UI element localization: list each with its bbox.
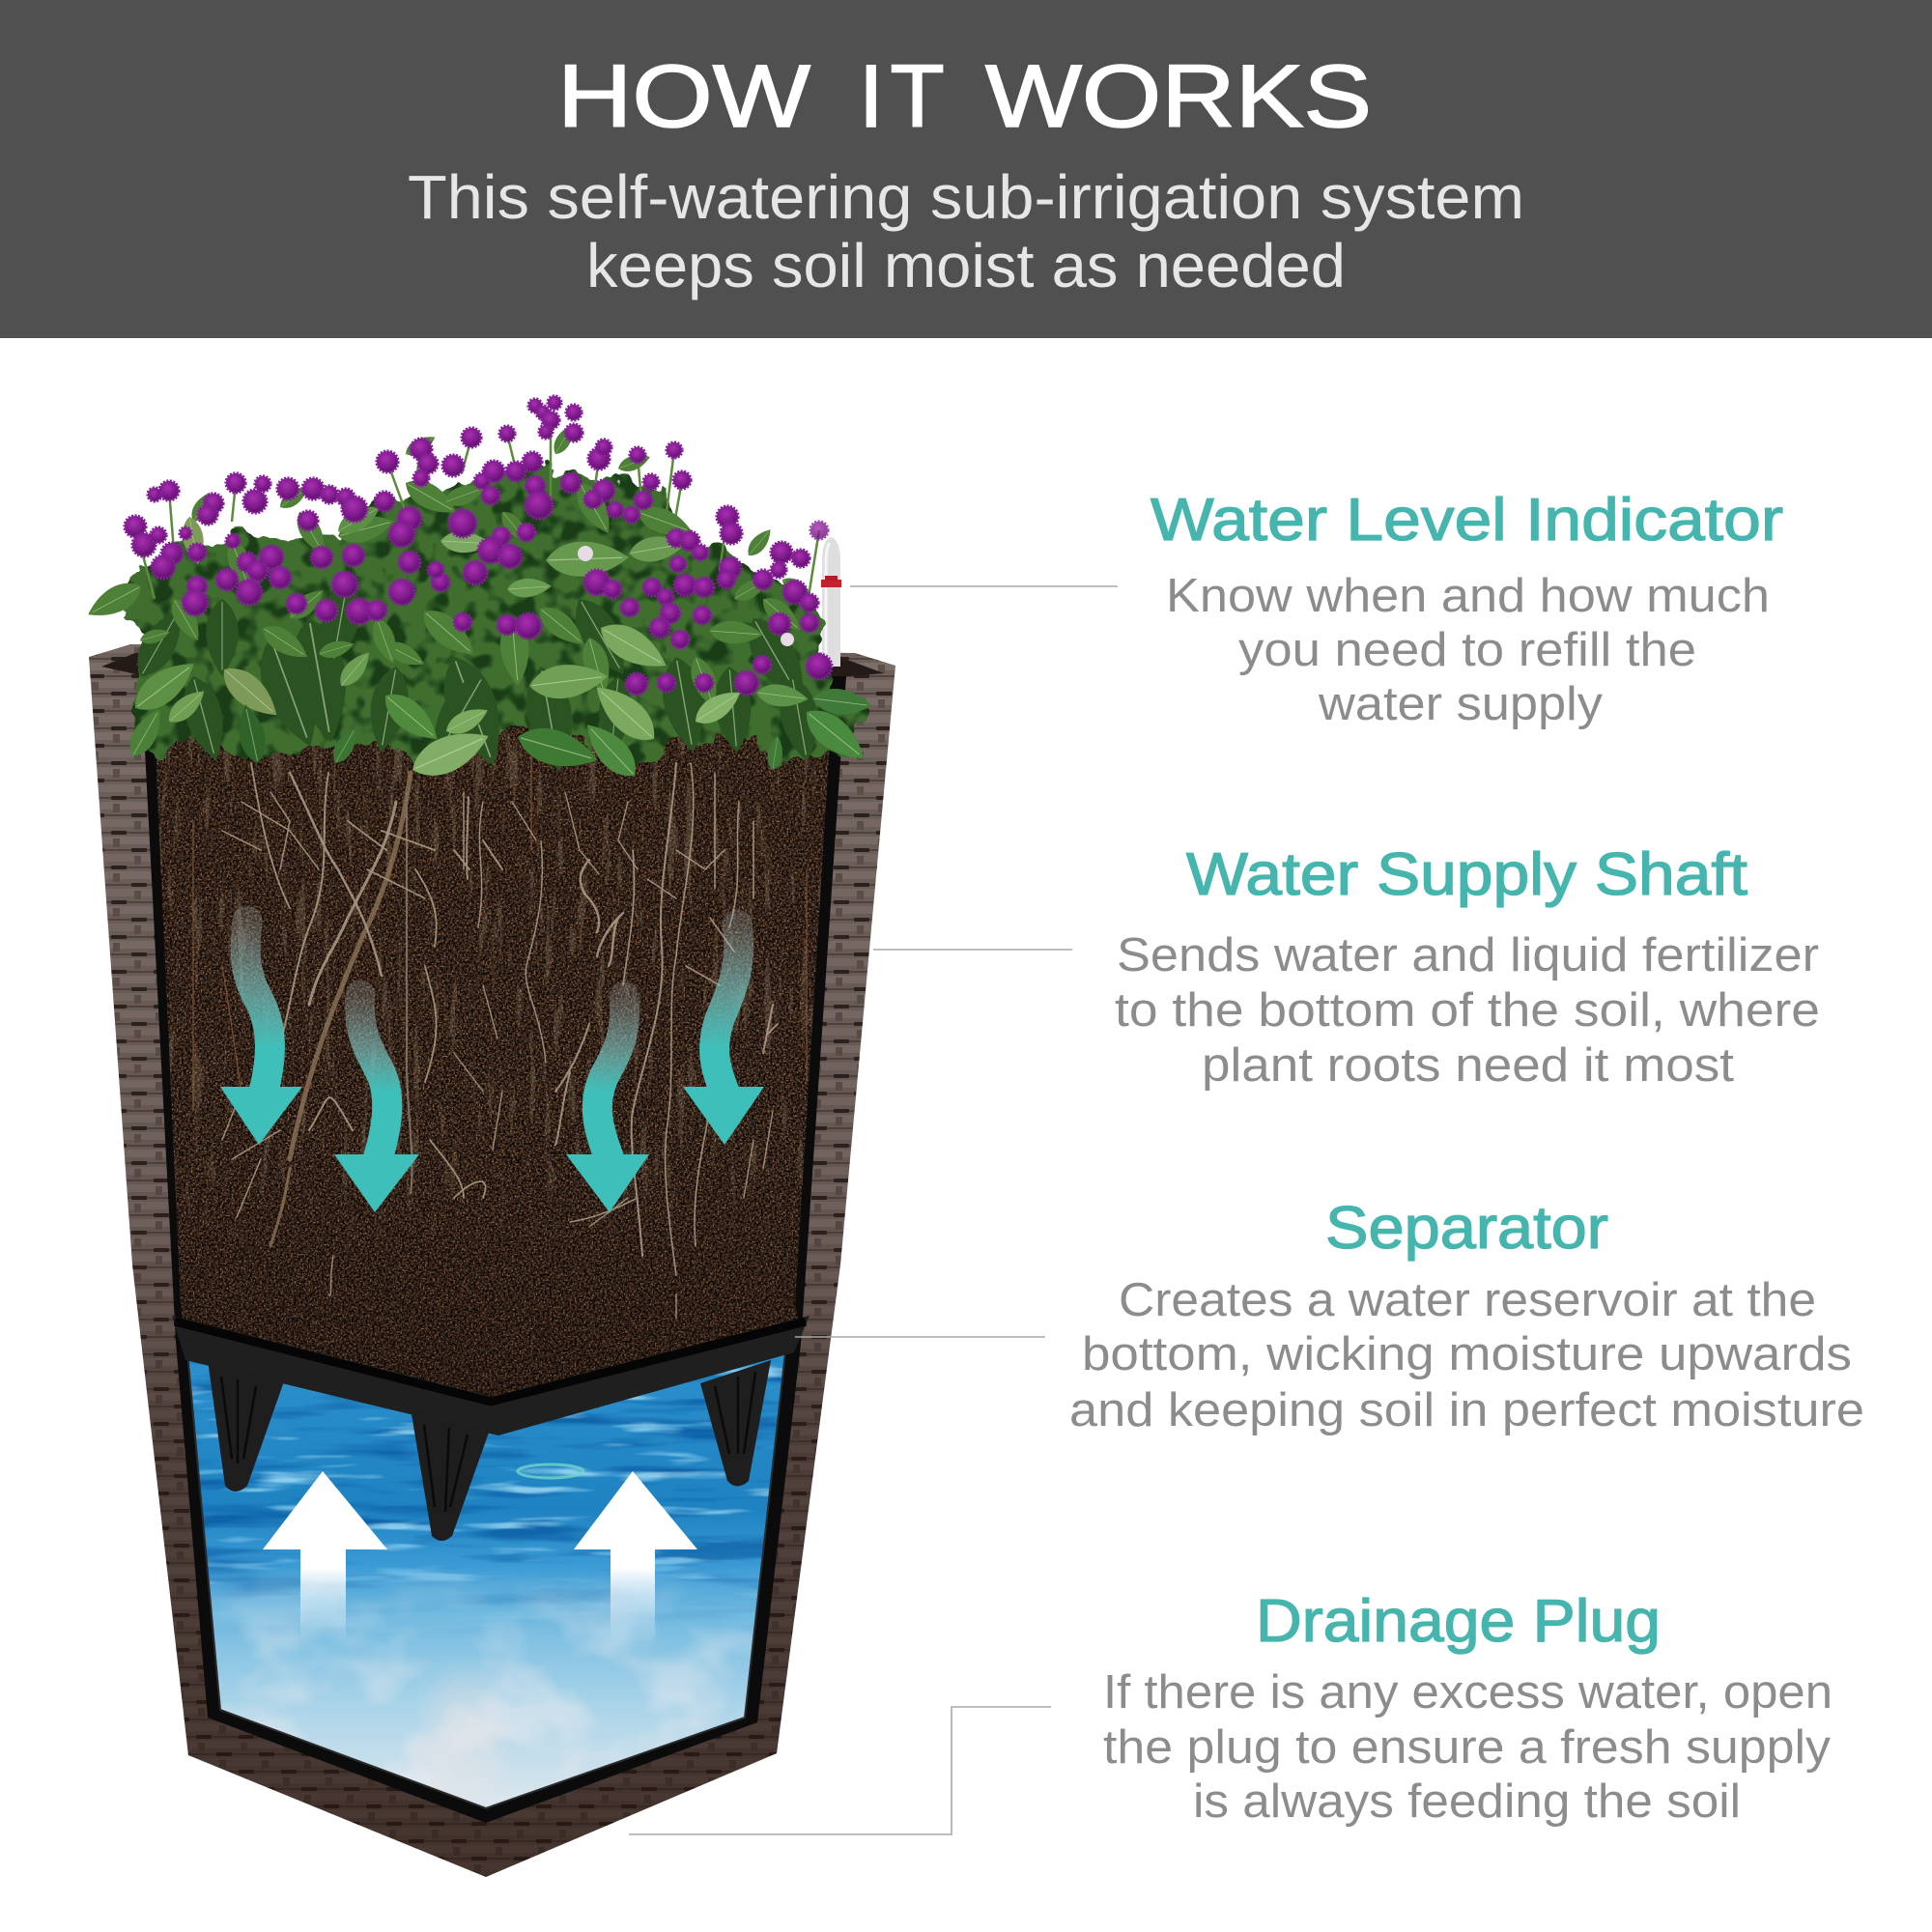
- gomphrena flowers: [125, 396, 832, 695]
- foliage mass: [121, 464, 865, 768]
- description: is always feeding the soil: [1193, 1776, 1741, 1828]
- separator: [172, 1316, 810, 1541]
- black inner liner: [141, 676, 846, 1823]
- subtitle: This self-watering sub-irrigation system: [408, 162, 1524, 232]
- bright front leaves: [123, 498, 873, 785]
- pale flower buds: [578, 546, 794, 646]
- mid leaves: [82, 421, 815, 711]
- plant roots: [193, 734, 807, 1319]
- water reservoir: [174, 1352, 811, 1826]
- description: Creates a water reservoir at the: [1119, 1274, 1816, 1326]
- feature: water level indicator: Water Level Indicator: [1151, 487, 1783, 554]
- feature: separator: [1069, 1195, 1864, 1436]
- description: [1069, 1274, 1864, 1436]
- feature: water supply shaft: [1115, 841, 1820, 1092]
- up arrow left: [263, 1471, 387, 1642]
- feature: drainage plug: Drainage Plug: [1256, 1588, 1661, 1655]
- description: bottom, wicking moisture upwards: [1082, 1328, 1852, 1380]
- feature: separator: Separator: [1325, 1195, 1608, 1262]
- white up arrows: [263, 1471, 697, 1642]
- down arrow 3: [566, 997, 649, 1212]
- description: and keeping soil in perfect moisture: [1069, 1384, 1864, 1436]
- water level gauge: [821, 537, 841, 667]
- up arrow right: [574, 1471, 697, 1642]
- description: the plug to ensure a fresh supply: [1103, 1721, 1832, 1774]
- title: HOW: [557, 47, 810, 146]
- description: [1115, 929, 1820, 1092]
- spike: right: [700, 1360, 771, 1486]
- description: water supply: [1318, 678, 1604, 730]
- planter illustration: [82, 396, 895, 1877]
- plant foliage and flowers: [82, 396, 873, 785]
- feature: drainage plug: [1103, 1588, 1833, 1828]
- subtitle: keeps soil moist as needed: [586, 231, 1346, 300]
- feature: water supply shaft: Water Supply Shaft: [1186, 841, 1747, 908]
- stems: [135, 420, 819, 609]
- teal down arrows: [220, 921, 764, 1212]
- dark back leaves: [127, 577, 825, 775]
- spike: centre: [411, 1408, 490, 1541]
- down arrow 4: [683, 924, 764, 1145]
- wicker pot body: [89, 644, 895, 1877]
- down arrow 2: [334, 995, 419, 1212]
- description: If there is any excess water, open: [1103, 1666, 1833, 1719]
- title: WORKS: [985, 47, 1372, 146]
- leader lines: [629, 586, 1118, 1834]
- title: IT: [859, 47, 943, 146]
- feature: water level indicator: [1151, 487, 1783, 730]
- description: Know when and how much: [1166, 570, 1770, 622]
- down arrow 1: [220, 921, 302, 1145]
- description: [1103, 1666, 1833, 1828]
- spike: left: [208, 1360, 284, 1492]
- description: you need to refill the: [1238, 624, 1696, 676]
- description: Sends water and liquid fertilizer: [1117, 929, 1819, 981]
- subtitle: [408, 162, 1524, 300]
- header band: [0, 0, 1932, 338]
- description: [1166, 570, 1770, 730]
- description: to the bottom of the soil, where: [1115, 984, 1820, 1037]
- soil: [145, 720, 840, 1406]
- description: plant roots need it most: [1202, 1039, 1734, 1092]
